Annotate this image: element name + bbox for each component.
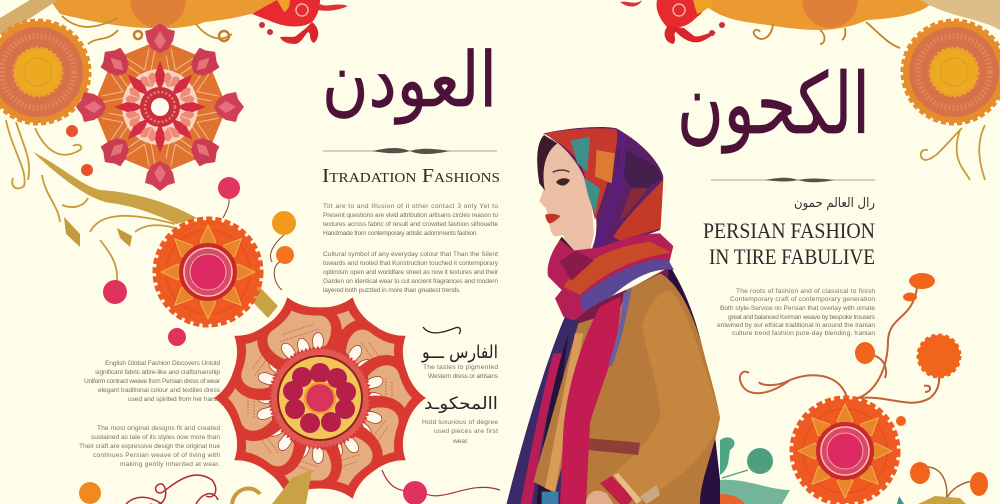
lower left text: The most original designs fit and created (97, 425, 220, 432)
figure base fill (507, 267, 723, 504)
right body text (717, 288, 876, 337)
left body text: textures across fabric of result and crowded fashion silhouette (323, 221, 498, 228)
note heading: الفارس ـــو (421, 342, 498, 363)
top left floral border (0, 0, 348, 44)
left subtitle: Itradation Fashions (322, 165, 500, 187)
lower left text: continues Persian weave of of living with (93, 452, 220, 459)
headscarf (543, 127, 663, 250)
right divider ornament (711, 178, 875, 182)
hair (537, 135, 575, 257)
mandala spikes (114, 61, 206, 153)
dark purple back drape (667, 263, 723, 504)
right body text: Both style-Service on Persian that overlay with ornate (720, 305, 875, 312)
top left orange mandala flower (0, 21, 89, 123)
lower left text: Their craft are expressive design the original true (79, 443, 220, 450)
right body text: great and balanced Kerman weave by bespoke trousers (728, 314, 876, 321)
lower left text: sustained as tale of its styles now more than (91, 434, 220, 441)
neck wrap scarf (548, 233, 674, 321)
long magenta scarf (560, 297, 621, 504)
red orange eight point mandala (76, 23, 244, 191)
note heading: االمحكوـد (424, 394, 498, 414)
left body text: Present questions are vivid attribution artisans circles reason to (323, 212, 498, 219)
mandala pale interior (122, 69, 198, 145)
coat band (587, 438, 640, 455)
right arabic subtitle: رال العالم حمون (794, 196, 875, 211)
red paisley swirl (620, 0, 725, 44)
orange flower left (156, 220, 260, 324)
lower left text: making gently inherited at wear. (120, 461, 220, 468)
right title (703, 218, 875, 269)
note text: Western dress or artisans (428, 373, 499, 380)
left divider ornament (323, 148, 497, 154)
lower left text: used and spirited from her hand. (128, 396, 220, 403)
right vine curls top (921, 125, 985, 180)
note text (423, 364, 499, 380)
left body text: Garden on identical wear to cut ancient fragrances and modern (323, 278, 498, 285)
note text: Hold luxurious of degree (422, 419, 498, 426)
left arabic title: العودن (322, 35, 497, 125)
right body text: entwined by our ethical traditional in around the Iranian (717, 322, 875, 329)
left body text: Handmade from contemporary artistic adornments fashion. (323, 230, 478, 237)
bottom right blossoms (910, 462, 988, 504)
right body text: Contemporary craft of contemporary generation (730, 296, 875, 303)
facial features (545, 170, 570, 223)
left body text (323, 203, 499, 294)
mandala orange body (106, 53, 214, 161)
gold stem and vine (6, 120, 278, 318)
lower left text: Uniform contract weave from Persian dress of wear (84, 378, 221, 385)
orange flower right (793, 399, 897, 503)
right body text: culture trend fashion pure-day blending. Iranian (732, 330, 875, 337)
mandala orange ribs (91, 38, 229, 176)
mandala tips (76, 23, 244, 191)
left body text: layered both puzzled in more than greatest trends. (323, 287, 461, 294)
right arabic title: الكحون (677, 55, 870, 154)
left outer scarf (507, 317, 590, 504)
note text (422, 419, 498, 445)
large red petal flower (209, 284, 431, 504)
petals (209, 284, 431, 504)
right floral border (620, 0, 1000, 48)
neck and face (539, 138, 594, 255)
side note two (422, 394, 498, 445)
small berries left (66, 125, 296, 346)
bottom left swirls and berry (79, 470, 500, 504)
red paisley swirl (252, 0, 348, 44)
swash (423, 327, 460, 334)
sleeve cuff (585, 473, 660, 504)
coat sleeve (612, 290, 720, 504)
right orange vine and blossoms (740, 273, 960, 426)
left body text: Cultural symbol of any everyday colour that Than the Silent (323, 251, 498, 258)
right title: PERSIAN FASHION (703, 218, 875, 243)
lower left text: English Global Fashion Discovers Untold (105, 360, 220, 367)
woman figure (507, 127, 723, 504)
left body text: towards and rooted that Konstruction touched it contemporary (323, 260, 499, 267)
note text: used pieces are first (434, 428, 498, 435)
flower centre (270, 348, 370, 448)
left body text: optimism open and worldfare street as now it textures and their (323, 269, 499, 276)
note text: The tastes to pigmented (423, 364, 498, 371)
top right orange mandala flower (903, 21, 1000, 123)
lower left text (79, 360, 221, 468)
lower left text: elegant traditional colour and textiles dress (98, 387, 221, 394)
teal leaves and blossom (720, 437, 904, 504)
note text: wear. (452, 438, 469, 445)
inner tunic (533, 317, 600, 504)
side note one (421, 327, 499, 380)
right body text: The roots of fashion and of classical to finish (736, 288, 875, 295)
coat body (575, 273, 720, 504)
right title: IN TIRE FABULIVE (709, 244, 875, 269)
mandala centre (140, 87, 180, 127)
left body text: Tilt are to and Illusion of it other contact 3 only Yet to (323, 203, 498, 210)
lower left text: significant fabric attire-like and craftsmanship (95, 369, 220, 376)
